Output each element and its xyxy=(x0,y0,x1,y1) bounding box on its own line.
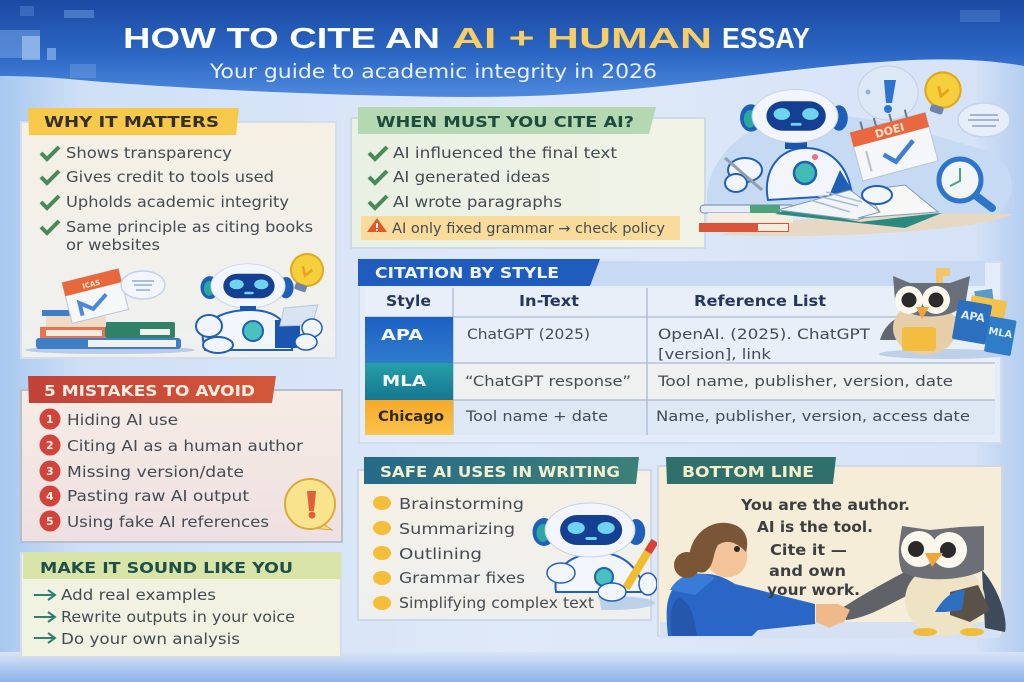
subtitle: Your guide to academic integrity in 2026 xyxy=(209,60,657,83)
heading ribbon xyxy=(358,107,656,134)
title: ESSAY xyxy=(722,23,810,55)
icon: light bulb xyxy=(284,249,328,296)
checklist: AI generated ideas xyxy=(393,168,550,186)
light bulb xyxy=(919,68,965,118)
heading ribbon xyxy=(28,108,239,135)
key message: AI is the tool. xyxy=(757,518,873,536)
bulleted list: Grammar fixes xyxy=(399,569,525,587)
arrow list: Rewrite outputs in your voice xyxy=(61,608,295,626)
column headers: Reference List xyxy=(694,292,826,310)
speech bubble xyxy=(958,103,1010,137)
checklist: Upholds academic integrity xyxy=(66,193,289,211)
arrow list: Do your own analysis xyxy=(61,630,240,648)
calendar: DOEI xyxy=(873,121,906,141)
illustration: owl xyxy=(832,526,1006,636)
numbered list: Using fake AI references xyxy=(67,513,269,531)
row: APA: [version], link xyxy=(658,347,772,363)
title: AI + HUMAN xyxy=(452,23,712,55)
calendar xyxy=(848,105,938,181)
checklist: AI influenced the final text xyxy=(393,144,617,162)
illustration: student xyxy=(667,523,846,636)
heading: MAKE IT SOUND LIKE YOU xyxy=(40,559,293,577)
column headers: Style xyxy=(386,292,431,310)
heading ribbon xyxy=(28,376,276,403)
row: APA xyxy=(365,317,870,363)
row: Chicago: Chicago xyxy=(378,409,444,425)
checklist: Gives credit to tools used xyxy=(66,168,274,186)
icon: calendar: ICAS xyxy=(82,278,101,291)
title xyxy=(123,23,810,55)
numbered list: 1 xyxy=(46,413,54,426)
title: HOW TO CITE AN xyxy=(123,23,440,55)
checklist: Shows transparency xyxy=(66,144,232,162)
numbered list: 3 xyxy=(46,465,54,478)
checklist xyxy=(41,144,313,254)
heading: 5 MISTAKES TO AVOID xyxy=(44,382,255,400)
key message xyxy=(740,496,910,599)
row: Chicago: Tool name + date xyxy=(465,409,608,425)
panel: when must you cite AI xyxy=(351,107,705,248)
heading: WHEN MUST YOU CITE AI? xyxy=(376,113,634,131)
numbered list: Hiding AI use xyxy=(67,411,178,429)
citation table xyxy=(365,288,995,435)
numbered list: Citing AI as a human author xyxy=(67,437,304,455)
column headers xyxy=(386,292,826,310)
text band under last item xyxy=(372,593,602,612)
arrow list xyxy=(34,586,295,648)
panel: make it sound like you xyxy=(21,552,341,657)
numbered list: 4 xyxy=(46,490,54,503)
warning callout xyxy=(361,216,680,240)
icon: book stack xyxy=(25,310,195,354)
heading: CITATION BY STYLE xyxy=(375,264,559,282)
icon: warning speech bubble xyxy=(285,479,335,530)
row: APA: APA xyxy=(381,326,423,344)
key message: your work. xyxy=(767,581,860,599)
magnifying glass with clock xyxy=(939,159,992,208)
heading: WHY IT MATTERS xyxy=(44,113,219,131)
stacked books xyxy=(699,205,795,232)
panel: citation by style xyxy=(358,259,1017,443)
panel: why it matters xyxy=(21,108,336,358)
icon: robot with pencil xyxy=(532,503,657,610)
numbered list: 5 xyxy=(46,515,54,528)
bulleted list xyxy=(373,495,594,612)
row: APA: ChatGPT (2025) xyxy=(467,327,590,343)
checklist: or websites xyxy=(66,236,160,254)
bulleted list: Simplifying complex text xyxy=(399,594,594,612)
illustration: owl with style books xyxy=(879,268,1017,359)
row: Chicago: Name, publisher, version, access date xyxy=(656,409,970,425)
bulleted list: Brainstorming xyxy=(399,495,524,513)
row: MLA: MLA xyxy=(382,372,426,390)
illustration: robot studying at desk xyxy=(699,66,1012,236)
numbered list: Pasting raw AI output xyxy=(67,487,249,505)
icon: speech bubble xyxy=(121,271,165,299)
exclamation bubble xyxy=(858,66,918,120)
row: MLA xyxy=(365,363,953,400)
numbered list: 2 xyxy=(46,439,54,452)
robot xyxy=(725,90,858,205)
open book xyxy=(775,185,942,228)
heading ribbon xyxy=(358,259,600,286)
checklist: Same principle as citing books xyxy=(66,218,313,236)
header banner xyxy=(0,0,1024,97)
column headers: In-Text xyxy=(519,292,579,310)
arrow list: Add real examples xyxy=(61,586,216,604)
panel: safe AI uses in writing xyxy=(358,457,657,620)
checklist xyxy=(369,144,617,211)
row: Chicago xyxy=(365,400,970,435)
heading band xyxy=(23,552,341,579)
numbered list xyxy=(40,408,304,532)
book: MLA: MLA xyxy=(987,326,1013,341)
heading ribbon xyxy=(666,457,836,484)
checklist: AI wrote paragraphs xyxy=(393,193,562,211)
bottom strip xyxy=(0,652,1024,682)
key message: You are the author. xyxy=(740,496,910,514)
row: MLA: “ChatGPT response” xyxy=(465,374,631,390)
bulleted list: Outlining xyxy=(399,545,482,563)
heading: SAFE AI USES IN WRITING xyxy=(380,463,620,481)
key message: Cite it — xyxy=(770,541,847,559)
icon: calendar xyxy=(62,269,128,323)
icon: robot with tablet xyxy=(196,264,322,353)
heading ribbon xyxy=(364,457,639,484)
panel: bottom line xyxy=(658,457,1006,638)
warning callout: AI only fixed grammar → check policy xyxy=(392,221,665,237)
heading: BOTTOM LINE xyxy=(682,463,814,481)
row: MLA: Tool name, publisher, version, date xyxy=(657,374,953,390)
panel: mistakes to avoid xyxy=(21,376,342,542)
book: APA: APA xyxy=(960,308,986,325)
bulleted list: Summarizing xyxy=(399,520,515,538)
numbered list: Missing version/date xyxy=(67,463,244,481)
row: APA: OpenAI. (2025). ChatGPT xyxy=(658,327,870,343)
key message: and own xyxy=(769,562,846,580)
